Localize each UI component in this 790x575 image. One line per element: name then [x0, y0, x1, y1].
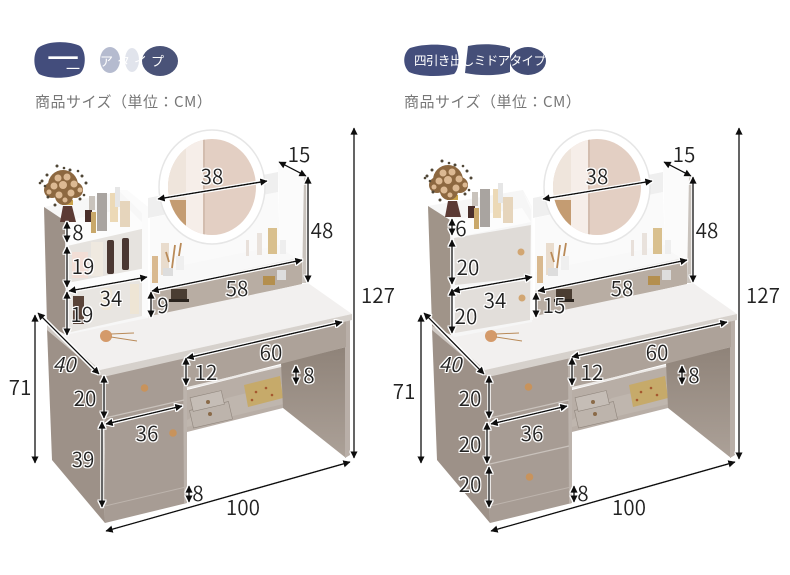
dimensions: right dresser: 34 [484, 284, 506, 314]
dimensions: left dresser: 8 [192, 477, 204, 507]
dimensions: right dresser: 20 [459, 382, 481, 412]
dimensions: right dresser: 20 [455, 300, 477, 330]
dimensions: left dresser: 58 [226, 272, 248, 302]
dimensions: left dresser: 40 [53, 348, 78, 378]
dimensions: right dresser: 15 [543, 289, 565, 319]
dimensions: left dresser: 15 [288, 138, 310, 168]
dimensions: right dresser: 6 [455, 212, 467, 242]
dimensions: right dresser: 8 [688, 359, 700, 389]
dimensions: right dresser: 40 [439, 348, 464, 378]
badge: four drawer type [404, 44, 546, 76]
dimensions: right dresser: 127 [746, 279, 780, 309]
dimensions: left dresser: 12 [195, 356, 217, 386]
dimensions: left dresser: 71 [9, 371, 31, 401]
dimensions: left dresser: 19 [72, 250, 94, 280]
desk: right dresser [424, 130, 737, 523]
dimensions: right dresser: 58 [611, 272, 633, 302]
dimensions: left dresser: 60 [260, 336, 282, 366]
dimensions: right dresser: 100 [612, 491, 646, 521]
dimensions: left dresser: 38 [201, 160, 223, 190]
dimensions: right dresser: 20 [459, 468, 481, 498]
desk: left dresser [39, 130, 352, 523]
dimensions: left dresser [9, 128, 395, 531]
knob: bottom drawer [526, 473, 533, 481]
dimensions: left dresser: 8 [303, 359, 315, 389]
dimensions: right dresser: 20 [459, 428, 481, 458]
knob: cabinet door lower [518, 294, 526, 302]
shelf unit [44, 190, 148, 335]
dimensions: left dresser: 127 [361, 279, 395, 309]
dimensions: right dresser: 8 [577, 477, 589, 507]
badge: first type: アタイプ [100, 51, 164, 70]
badge: first type: 一 [47, 34, 79, 80]
decoration: cosmetics [468, 183, 513, 229]
dimensions: right dresser: 71 [393, 375, 415, 405]
dimensions: left dresser: 19 [71, 298, 93, 328]
heading: right size label: 商品サイズ（単位：CM） [404, 91, 581, 112]
knob: cabinet door upper [518, 248, 524, 256]
dimensions: right dresser: 48 [696, 214, 718, 244]
heading: left size label: 商品サイズ（単位：CM） [35, 91, 212, 112]
dimensions: right dresser: 38 [586, 160, 608, 190]
dimensions: right dresser: 15 [673, 138, 695, 168]
knob: door [169, 429, 177, 437]
knob: top drawer [525, 383, 532, 391]
cabinet unit [428, 190, 533, 337]
dimensions: left dresser: 9 [157, 289, 169, 319]
dimensions: right dresser: 60 [646, 336, 668, 366]
dimensions: right dresser: 36 [521, 417, 543, 447]
badge: first type: 一 [66, 59, 80, 79]
decoration: flowers [39, 164, 88, 222]
badge: four drawer type: 四引き出しミドアタイプ [414, 50, 546, 69]
dimensions: left dresser: 100 [226, 491, 260, 521]
dimensions: right dresser: 20 [457, 251, 479, 281]
dimensions: left dresser: 39 [72, 443, 94, 473]
badge: first type [34, 34, 178, 80]
knob: upper drawer [141, 384, 148, 392]
dimensions: left dresser: 20 [74, 382, 96, 412]
dimensions: left dresser: 48 [311, 214, 333, 244]
dimensions: right dresser: 12 [581, 356, 603, 386]
dimensions: right dresser [393, 128, 780, 531]
dimensions: left dresser: 8 [72, 216, 84, 246]
decoration: flowers [424, 160, 472, 217]
dimensions: left dresser: 36 [136, 417, 158, 447]
decoration: cosmetics [85, 187, 130, 233]
dimensions: left dresser: 34 [100, 282, 122, 312]
